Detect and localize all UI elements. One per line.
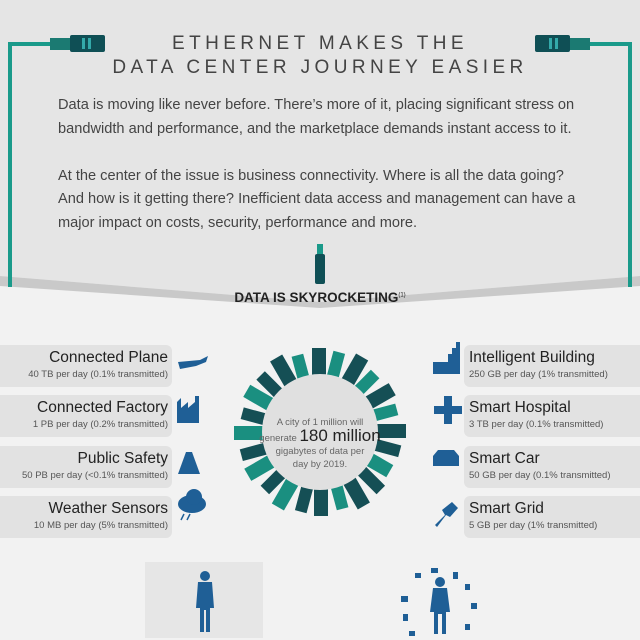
title: DATA CENTER JOURNEY EASIER	[112, 57, 528, 78]
icon: factory	[177, 396, 199, 423]
heading: data is skyrocketing: DATA IS SKYROCKETING(1)	[234, 290, 406, 305]
icon: plug	[435, 502, 458, 527]
header panel	[0, 0, 640, 308]
stat: smart hospital	[464, 395, 640, 437]
city callout text: day by 2019.	[293, 459, 347, 470]
intro text: bandwidth and performance, and the marketplace demands instant access to it.	[58, 120, 572, 136]
intro text: major impact on costs, security, performance and more.	[58, 214, 417, 230]
stat: smart car: Smart Car	[469, 450, 540, 467]
stat: connected plane: Connected Plane	[49, 349, 168, 366]
cable: left	[8, 35, 105, 287]
stat: weather sensors: Weather Sensors	[49, 500, 168, 517]
intro text	[58, 97, 576, 230]
intro text: And how is it getting there? Inefficient data access and management can have a	[58, 191, 575, 207]
title: ETHERNET MAKES THE	[172, 33, 468, 54]
stat: intelligent building: 250 GB per day (1% transmitted)	[469, 369, 608, 380]
stat: smart grid: 5 GB per day (1% transmitted)	[469, 520, 597, 531]
stat: public safety: Public Safety	[78, 450, 168, 467]
icon: cone	[178, 452, 200, 474]
stat: smart hospital: 3 TB per day (0.1% transmitted)	[469, 419, 603, 430]
icon: building	[433, 342, 460, 374]
city callout text: gigabytes of data per	[276, 446, 364, 457]
center cable connector	[315, 244, 325, 284]
stat: connected plane	[0, 345, 172, 387]
intro text: Data is moving like never before. There’s more of it, placing significant stress on	[58, 97, 574, 113]
stat: weather sensors	[0, 496, 172, 538]
icon: cloud	[178, 489, 206, 520]
stat: smart grid	[464, 496, 640, 538]
stat: public safety: 50 PB per day (<0.1% transmitted)	[22, 470, 168, 481]
city circle	[234, 348, 406, 516]
stat: weather sensors: 10 MB per day (5% transmitted)	[34, 520, 168, 531]
stat: smart grid: Smart Grid	[469, 500, 544, 517]
stat: smart car: 50 GB per day (0.1% transmitted)	[469, 470, 611, 481]
title	[112, 33, 528, 78]
stat: public safety	[0, 446, 172, 488]
icon: cross	[434, 396, 462, 424]
stat: connected factory: 1 PB per day (0.2% transmitted)	[33, 419, 168, 430]
figure: person with devices	[401, 568, 477, 636]
figure: person with binary	[145, 562, 263, 638]
city callout text: A city of 1 million will	[277, 417, 363, 428]
cable: right	[535, 35, 632, 287]
stat: smart car	[464, 446, 640, 488]
intro text: At the center of the issue is business connectivity. Where is all the data going?	[58, 168, 564, 184]
icon: car	[433, 450, 459, 466]
stat: intelligent building: Intelligent Building	[469, 349, 595, 366]
stat: connected plane: 40 TB per day (0.1% transmitted)	[28, 369, 168, 380]
stat: smart hospital: Smart Hospital	[469, 399, 571, 416]
icon: plane	[178, 356, 208, 369]
city callout text: generate 180 million	[259, 426, 381, 445]
stat: intelligent building	[464, 345, 640, 387]
stat: connected factory	[0, 395, 172, 437]
stat: connected factory: Connected Factory	[37, 399, 168, 416]
city callout text	[259, 417, 381, 470]
icons	[177, 342, 462, 527]
